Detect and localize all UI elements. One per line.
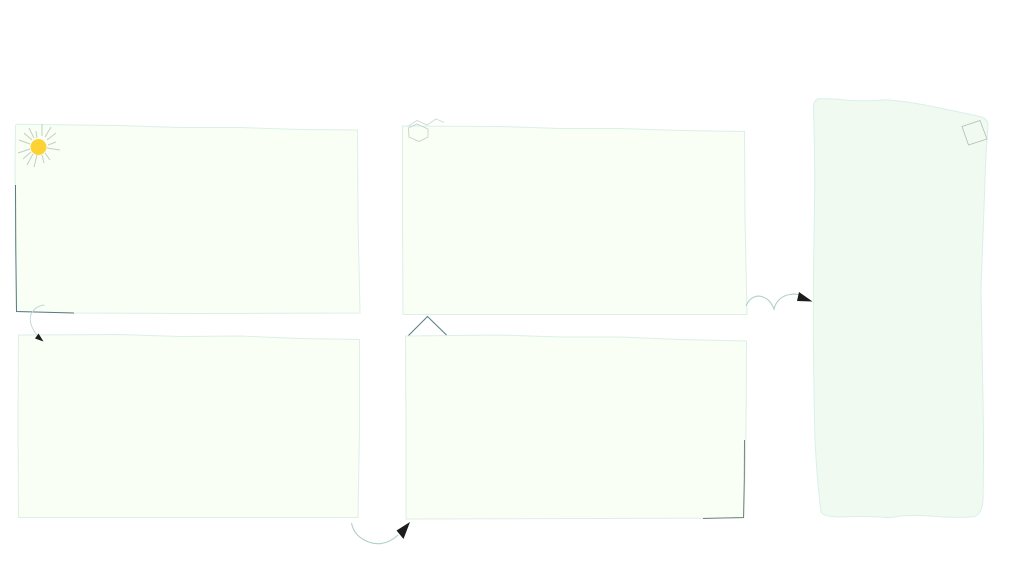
- panel: bottom middle: [406, 335, 746, 519]
- icon: sun: [18, 124, 60, 167]
- panel: top left: [15, 124, 360, 314]
- accent: lower-left corner stroke: [16, 185, 74, 313]
- accent: lower-right corner stroke: [703, 440, 744, 518]
- arrow: top left to bottom left: [30, 305, 44, 342]
- panel: top middle: [402, 126, 747, 314]
- arrow: bottom left to bottom middle: [352, 522, 410, 544]
- panel: right column: [813, 99, 988, 518]
- arrow: top middle to right panel: [746, 292, 812, 309]
- icon: tilted square: [962, 120, 987, 145]
- icon: hexagon with wave: [408, 119, 444, 142]
- panel: bottom left: [18, 334, 360, 518]
- icon: chevron roof: [408, 316, 446, 336]
